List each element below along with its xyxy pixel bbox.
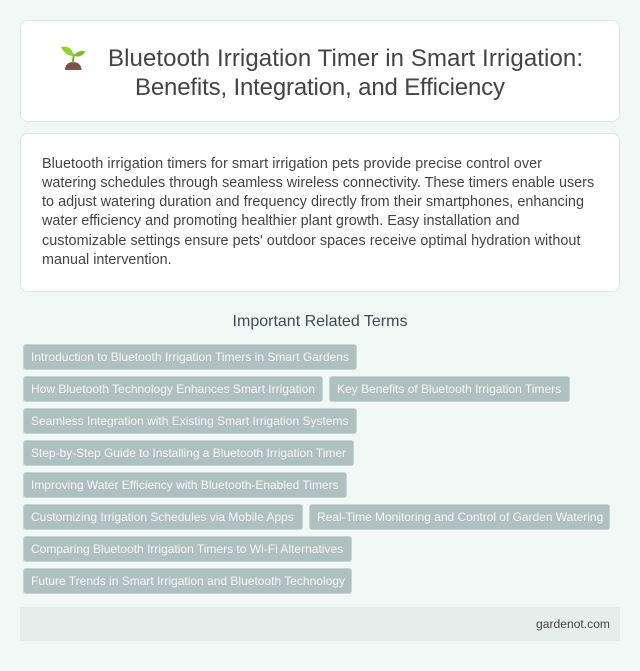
tag: water efficiency <box>23 472 347 498</box>
tag: seamless integration: Seamless Integration with Existing Smart Irrigation Systems <box>31 414 348 428</box>
intro paragraph: manual intervention. <box>42 252 172 268</box>
tag: introduction: Introduction to Bluetooth Irrigation Timers in Smart Gardens <box>31 350 349 364</box>
intro paragraph: watering schedules through seamless wireless connectivity. These timers enable users <box>42 175 594 191</box>
tag: water efficiency: Improving Water Efficiency with Bluetooth-Enabled Timers <box>31 478 339 492</box>
intro paragraph: water efficiency and promoting healthier plant growth. Easy installation and <box>42 213 520 229</box>
tag: how bluetooth <box>23 376 322 402</box>
tag: real-time <box>309 504 610 530</box>
tag: future trends <box>23 568 352 594</box>
tag: key benefits <box>329 376 570 402</box>
intro paragraph <box>42 156 594 268</box>
title card <box>20 20 620 122</box>
tag: introduction <box>23 344 357 370</box>
intro paragraph: customizable settings ensure pets' outdoor spaces receive optimal hydration without <box>42 233 580 249</box>
footer site name: gardenot.com <box>536 617 610 631</box>
tag: future trends: Future Trends in Smart Irrigation and Bluetooth Technology <box>31 574 345 588</box>
tag: comparing: Comparing Bluetooth Irrigation Timers to Wi-Fi Alternatives <box>31 542 343 556</box>
intro paragraph: Bluetooth irrigation timers for smart irrigation pets provide precise control over <box>42 156 542 172</box>
title <box>108 45 583 101</box>
intro paragraph: to adjust watering duration and frequency directly from their smartphones, enhancing <box>42 194 584 210</box>
tag: real-time: Real-Time Monitoring and Control of Garden Watering <box>317 510 603 524</box>
related terms tags <box>23 344 610 594</box>
tag: seamless integration <box>23 408 356 434</box>
intro text card <box>20 133 620 292</box>
tag: step by step <box>23 440 354 466</box>
tag: step by step: Step-by-Step Guide to Installing a Bluetooth Irrigation Timer <box>31 446 346 460</box>
tag: key benefits: Key Benefits of Bluetooth Irrigation Timers <box>337 382 561 396</box>
related terms heading: Important Related Terms <box>233 313 407 330</box>
footer bar <box>20 607 620 641</box>
title: Bluetooth Irrigation Timer in Smart Irrigation: <box>108 45 583 72</box>
icon: seedling <box>61 46 86 70</box>
tag: customizing: Customizing Irrigation Schedules via Mobile Apps <box>31 510 294 524</box>
tag: customizing <box>23 504 302 530</box>
tag: how bluetooth: How Bluetooth Technology Enhances Smart Irrigation <box>31 382 315 396</box>
title: Benefits, Integration, and Efficiency <box>135 74 505 101</box>
tag: comparing <box>23 536 352 562</box>
